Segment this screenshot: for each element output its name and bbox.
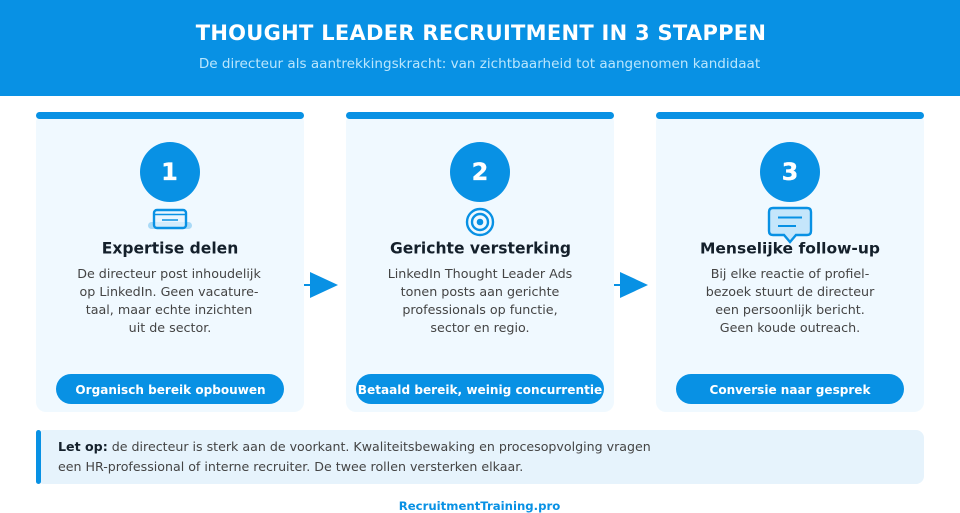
badge [356, 374, 604, 404]
badge [676, 374, 904, 404]
step number 1: 1 [161, 158, 178, 186]
footer brand: RecruitmentTraining.pro [399, 499, 560, 513]
step number 3: 3 [782, 158, 798, 186]
panel: step 2 [346, 112, 614, 412]
description: Bij elke reactie of profiel- [711, 266, 869, 281]
description: LinkedIn Thought Leader Ads [388, 266, 572, 281]
step number 2 [450, 142, 510, 202]
arrow 2 [614, 272, 648, 298]
description: sector en regio. [430, 320, 530, 335]
subtitle: De directeur als aantrekkingskracht: van zichtbaarheid tot aangenomen kandidaat [199, 56, 760, 72]
step number 1 [140, 142, 200, 202]
step number 3 [760, 142, 820, 202]
description: De directeur post inhoudelijk [77, 266, 261, 281]
callout [36, 430, 924, 484]
heading: Expertise delen [102, 240, 238, 258]
badge: Organisch bereik opbouwen [75, 383, 266, 397]
description: Geen koude outreach. [720, 320, 860, 335]
title: THOUGHT LEADER RECRUITMENT IN 3 STAPPEN [196, 21, 766, 45]
heading: Gerichte versterking [390, 240, 571, 258]
icon: card [148, 210, 192, 229]
step number 2: 2 [472, 158, 488, 186]
description: op LinkedIn. Geen vacature- [80, 284, 258, 299]
arrow 1 [304, 272, 338, 298]
badge: Betaald bereik, weinig concurrentie [358, 383, 602, 397]
heading: Menselijke follow-up [700, 240, 880, 258]
description: taal, maar echte inzichten [86, 302, 252, 317]
description: een persoonlijk bericht. [715, 302, 865, 317]
header band [0, 0, 960, 96]
panel: step 1 [36, 112, 304, 412]
icon: chat bubble [769, 208, 811, 242]
badge [56, 374, 284, 404]
description: tonen posts aan gerichte [401, 284, 560, 299]
badge: Conversie naar gesprek [709, 383, 871, 397]
description: professionals op functie, [402, 302, 558, 317]
description: bezoek stuurt de directeur [706, 284, 875, 299]
panel: step 3 [656, 112, 924, 412]
callout text: Let op: de directeur is sterk aan de voorkant. Kwaliteitsbewaking en procesopvolging vragen [58, 439, 651, 454]
callout text: een HR-professional of interne recruiter. De twee rollen versterken elkaar. [58, 459, 523, 474]
description: uit de sector. [129, 320, 211, 335]
icon: target [467, 209, 493, 235]
